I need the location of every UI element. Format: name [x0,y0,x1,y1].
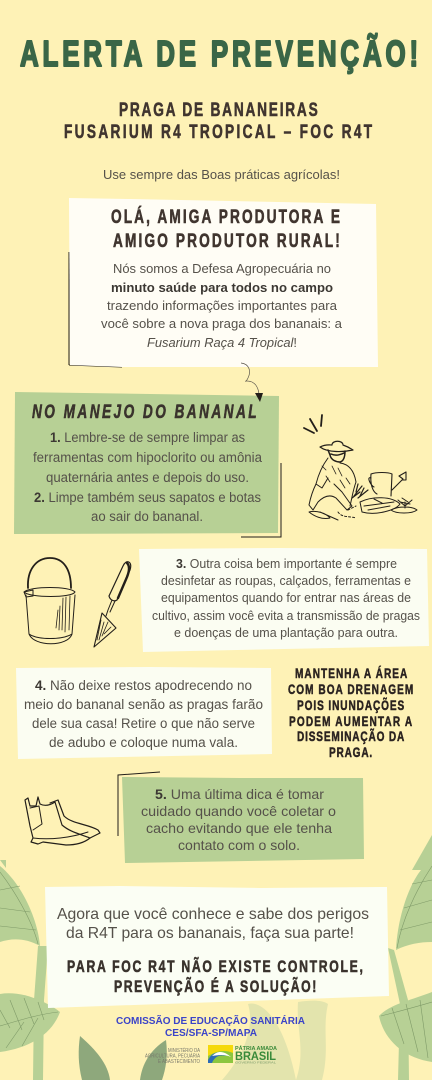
greeting text: Fusarium Raça 4 Tropical! [147,335,297,350]
credits: COMISSÃO DE EDUCAÇÃO SANITÁRIA [116,1014,305,1027]
logo: ministry: MINISTÉRIO DA [168,1047,201,1054]
greeting heading: AMIGO PRODUTOR RURAL! [113,230,340,252]
manejo text: 2. Limpe também seus sapatos e botas [34,490,261,505]
arrow [241,363,263,402]
icon: farmer planting [304,415,417,520]
logo: ministry: E ABASTECIMENTO [158,1059,200,1065]
callout: drainage: PRAGA. [329,744,372,760]
closing slogan [67,956,363,997]
manejo text: quaternária antes e depois do uso. [46,470,249,485]
panel: tip 4 [16,667,272,759]
icon: bucket [24,558,75,644]
panel: tip 3: e doenças de uma plantação para outra. [174,625,398,640]
icon: boots [25,797,100,845]
greeting heading [111,206,340,252]
icon: trowel [94,562,131,647]
intro line: Use sempre das Boas práticas agrícolas! [103,167,340,182]
callout: drainage: PODEM AUMENTAR A [289,713,412,729]
panel: no manejo do bananal [14,392,281,537]
manejo text: 1. Lembre-se de sempre limpar as [50,430,245,445]
manejo text: ao sair do bananal. [91,509,203,524]
panel: tip 3: equipamentos quando for entrar nas áreas de [161,590,411,605]
logo: Pátria Amada Brasil: PÁTRIA AMADA [235,1045,277,1052]
closing slogan: PARA FOC R4T NÃO EXISTE CONTROLE, [67,956,363,977]
panel: greeting [69,198,378,367]
credits [116,1014,305,1039]
panel: tip 4: meio do bananal senão as pragas farão [24,697,263,712]
manejo text: ferramentas com hipoclorito ou amônia [33,450,262,465]
greeting heading: OLÁ, AMIGA PRODUTORA E [111,206,340,228]
panel: tip 3 [139,548,429,652]
manejo text [33,430,262,524]
panel: closing message [45,886,389,1008]
panel: tip 3: desinfetar as roupas, calçados, ferramentas e [161,573,411,588]
logo: Pátria Amada Brasil: BRASIL [235,1049,276,1063]
logo: ministry: AGRICULTURA, PECUÁRIA [145,1052,201,1060]
greeting text: minuto saúde para todos no campo [111,280,333,295]
panel: tip 4: dele sua casa! Retire o que não serve [32,716,255,731]
leaves: bottom background foliage [0,835,432,1080]
logo: Pátria Amada Brasil [208,1045,277,1064]
callout: drainage: POIS INUNDAÇÕES [297,696,404,713]
closing slogan: PREVENÇÃO É A SOLUÇÃO! [114,976,316,997]
callout: drainage: COM BOA DRENAGEM [288,681,413,697]
panel: tip 3: cultivo, assim você evita a transmissão de pragas [152,608,420,623]
subtitle [64,99,372,143]
credits: CES/SFA-SP/MAPA [165,1027,257,1039]
logo: ministry [145,1047,201,1065]
panel: tip 5: cuidado quando você coletar o [141,803,336,819]
greeting text: você sobre a nova praga dos bananais: a [101,316,343,331]
greeting text: Nós somos a Defesa Agropecuária no [113,261,331,276]
panel: tip 3: 3. Outra coisa bem importante é sempre [176,556,397,571]
panel: tip 4: 4. Não deixe restos apodrecendo no [35,678,252,693]
panel: tip 5 [118,772,364,863]
subtitle: FUSARIUM R4 TROPICAL – FOC R4T [64,121,372,143]
logo: Pátria Amada Brasil: GOVERNO FEDERAL [235,1060,276,1064]
callout: drainage [288,664,413,760]
callout: drainage: MANTENHA A ÁREA [295,664,407,681]
greeting text: trazendo informações importantes para [107,298,338,313]
panel: tip 4: de adubo e coloque numa vala. [49,735,238,750]
manejo heading: NO MANEJO DO BANANAL [32,401,257,423]
title: ALERTA DE PREVENÇÃO! [20,34,418,74]
greeting text [101,261,343,350]
panel: closing message: Agora que você conhece e sabe dos perigos [57,906,369,923]
callout: drainage: DISSEMINAÇÃO DA [297,727,404,744]
subtitle: PRAGA DE BANANEIRAS [119,99,318,121]
panel: tip 5: 5. Uma última dica é tomar [155,786,324,802]
panel: tip 5: contato com o solo. [178,837,300,853]
panel: closing message: da R4T para os bananais, faça sua parte! [66,925,354,942]
panel: tip 5: cacho evitando que ele tenha [146,820,332,836]
